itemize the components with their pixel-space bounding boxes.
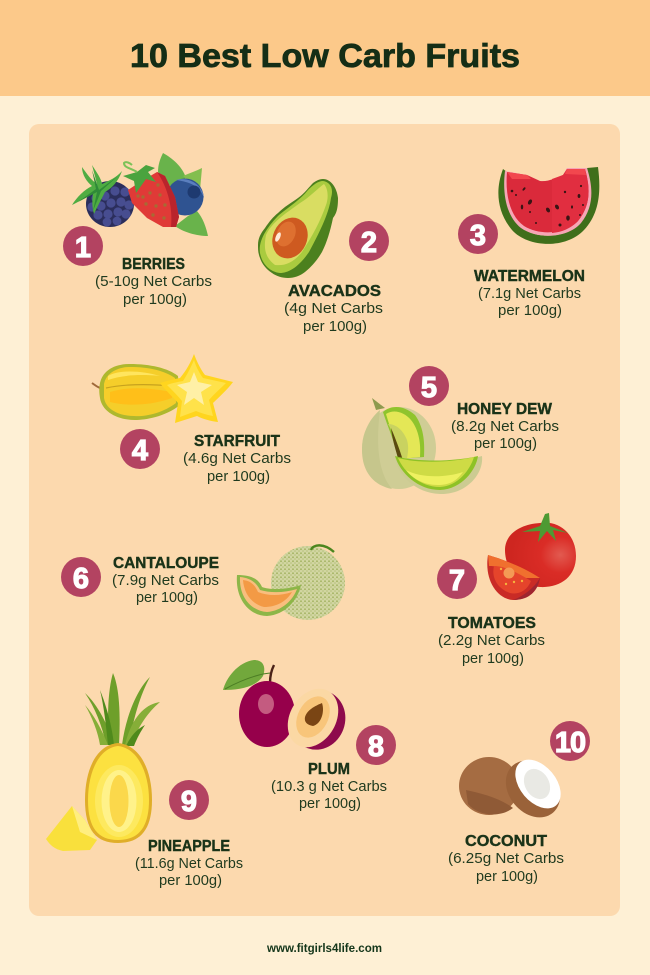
label: berries: BERRIES [122,256,185,273]
item: cantaloupe [61,545,345,620]
label: coconut: COCONUT [465,833,548,850]
item: plum [223,660,396,812]
number badge 1: 1 [75,232,91,264]
label: pineapple [135,838,243,889]
label: avocados: per 100g) [303,319,367,335]
icon: pineapple [46,673,160,851]
label: coconut [448,833,564,885]
label: watermelon: (7.1g Net Carbs [478,286,581,302]
number badge 9 [169,780,209,820]
number badge 7: 7 [449,565,465,597]
title: 10 Best Low Carb Fruits [130,38,520,75]
label: starfruit: STARFRUIT [194,433,281,450]
icon: starfruit [92,354,233,423]
header band [0,0,650,96]
label: watermelon: per 100g) [498,303,562,319]
icon: watermelon [498,167,599,244]
label: cantaloupe [112,555,219,606]
label: pineapple: (11.6g Net Carbs [135,856,243,872]
number badge 3: 3 [470,220,486,252]
number badge 4: 4 [132,435,148,467]
icon: berries [72,153,208,236]
number badge 4 [120,429,160,469]
item: berries [63,153,212,308]
label: tomatoes: per 100g) [462,651,524,667]
label: honey dew: per 100g) [474,436,537,452]
icon: avocado [258,179,338,278]
label: cantaloupe: per 100g) [136,590,198,606]
item: watermelon [458,167,599,319]
label: avocados: AVACADOS [288,283,381,300]
item: avocados [258,179,389,335]
label: plum [271,761,387,812]
label: tomatoes: TOMATOES [448,615,536,632]
panel: fruits [29,124,620,916]
label: honey dew: (8.2g Net Carbs [451,419,559,435]
label: starfruit [183,433,291,485]
label: berries [95,256,212,308]
icon: plum [223,660,354,757]
number badge 7 [437,559,477,599]
item: honey dew [362,366,559,494]
number badge 3 [458,214,498,254]
label: watermelon: WATERMELON [474,268,585,285]
item: starfruit [92,354,291,485]
number badge 8: 8 [368,731,384,763]
number badge 1 [63,226,103,266]
footer url: www.fitgirls4life.com [266,941,382,955]
item: pineapple [46,673,243,889]
label: avocados: (4g Net Carbs [284,301,383,317]
number badge 9: 9 [181,786,197,818]
label: cantaloupe: (7.9g Net Carbs [112,573,219,589]
label: coconut: per 100g) [476,869,538,885]
icon: coconut [459,750,571,828]
number badge 10: 10 [555,727,585,759]
label: coconut: (6.25g Net Carbs [448,851,564,867]
label: watermelon [474,268,585,319]
icon: cantaloupe [237,545,345,620]
number badge 5: 5 [421,372,437,404]
number badge 2 [349,221,389,261]
label: tomatoes: (2.2g Net Carbs [438,633,545,649]
number badge 2: 2 [361,227,377,259]
number badge 8 [356,725,396,765]
label: plum: (10.3 g Net Carbs [271,779,387,795]
label: berries: (5-10g Net Carbs [95,274,212,290]
number badge 6: 6 [73,563,89,595]
number badge 10 [550,721,590,761]
label: berries: per 100g) [123,292,187,308]
label: plum: per 100g) [299,796,361,812]
label: pineapple: per 100g) [159,873,222,889]
item: tomatoes [437,513,576,667]
label: plum: PLUM [308,761,350,778]
item: coconut [448,721,590,885]
label: pineapple: PINEAPPLE [148,838,230,855]
label: avocados [284,283,383,335]
label: honey dew: HONEY DEW [457,401,552,418]
label: honey dew [451,401,559,452]
number badge 5 [409,366,449,406]
label: starfruit: per 100g) [207,469,270,485]
label: cantaloupe: CANTALOUPE [113,555,219,572]
label: tomatoes [438,615,545,667]
number badge 6 [61,557,101,597]
label: starfruit: (4.6g Net Carbs [183,451,291,467]
icon: tomatoes [487,513,576,600]
icon: honeydew melon [362,398,482,494]
